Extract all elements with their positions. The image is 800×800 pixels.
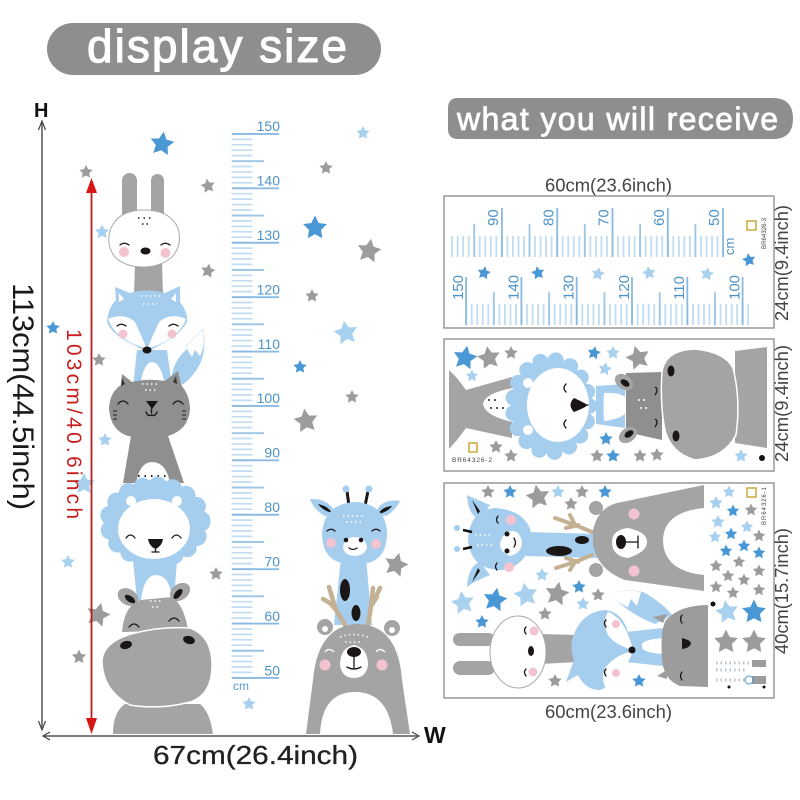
rabbit bbox=[453, 616, 578, 688]
rabbit bbox=[109, 173, 180, 295]
vertical ruler 50 to 150 cm: 80 bbox=[264, 499, 280, 515]
antlers bbox=[323, 587, 380, 625]
size label: bottom 60cm: 60cm(23.6inch) bbox=[545, 702, 672, 722]
ruler ticks: 50 to 90 bbox=[451, 209, 737, 255]
size label: top 60cm: 60cm(23.6inch) bbox=[545, 176, 672, 196]
size label: 24cm sheet 2: 24cm(9.4inch) bbox=[772, 345, 792, 462]
ruler ticks: 100 to 150: 140 bbox=[505, 275, 522, 300]
size label: 24cm sheet 3: 24cm(9.4inch) bbox=[772, 205, 792, 321]
ruler ticks: 50 to 90: 60 bbox=[651, 209, 668, 226]
vertical ruler 50 to 150 cm: 60 bbox=[264, 608, 280, 624]
vertical ruler 50 to 150 cm: 90 bbox=[264, 444, 280, 460]
panel: sheet 3 ruler bbox=[444, 196, 774, 328]
ruler ticks: 100 to 150: 150 bbox=[450, 275, 467, 300]
product code bbox=[747, 217, 768, 249]
ruler ticks: 50 to 90: 90 bbox=[485, 209, 502, 226]
lion body bbox=[596, 384, 627, 428]
product code bbox=[452, 443, 765, 464]
cat bbox=[653, 605, 708, 687]
product code: BR64326-2 bbox=[452, 457, 492, 464]
fox bbox=[566, 610, 663, 690]
red height arrow bbox=[86, 178, 97, 734]
ruler ticks: 50 to 90: cm bbox=[722, 238, 737, 255]
lion bbox=[513, 360, 589, 452]
giraffe bbox=[454, 495, 600, 587]
ruler ticks: 100 to 150: 120 bbox=[616, 275, 633, 300]
ruler ticks: 50 to 90: 80 bbox=[540, 209, 557, 226]
height and width axes: H bbox=[34, 100, 48, 122]
ruler ticks: 100 to 150: 100 bbox=[726, 275, 744, 300]
cat body bbox=[449, 370, 513, 449]
bear bbox=[306, 619, 410, 734]
height and width axes bbox=[34, 100, 446, 748]
size label: 40cm sheet 1: 40cm(15.7inch) bbox=[772, 528, 792, 654]
height and width axes: W bbox=[424, 722, 446, 748]
total height label: 113cm(44.5inch) bbox=[6, 283, 39, 510]
lion bbox=[108, 485, 202, 600]
ruler ticks: 50 to 90: 50 bbox=[706, 209, 723, 226]
cat bbox=[109, 371, 190, 483]
hippo bbox=[102, 579, 213, 734]
vertical ruler 50 to 150 cm bbox=[233, 118, 280, 693]
vertical ruler 50 to 150 cm: 150 bbox=[257, 118, 280, 134]
stars bbox=[452, 343, 748, 462]
product code: BR64326-3 bbox=[762, 217, 768, 249]
product code and mini preview bbox=[710, 486, 768, 688]
fox tail bbox=[610, 590, 672, 624]
antlers bbox=[555, 515, 592, 570]
ruler ticks: 100 to 150: 110 bbox=[671, 276, 688, 300]
giraffe bbox=[310, 486, 400, 625]
heading: display size: display size bbox=[87, 20, 347, 72]
stars: left growth chart bbox=[46, 126, 411, 710]
fox tail bbox=[171, 329, 204, 390]
ruler ticks: 100 to 150: 130 bbox=[561, 275, 578, 300]
product code and mini preview: BR64326-1 bbox=[762, 486, 768, 525]
ruler ticks: 100 to 150 bbox=[450, 275, 749, 314]
vertical ruler 50 to 150 cm: 70 bbox=[264, 554, 280, 570]
heading: what you will receive: what you will receive bbox=[456, 101, 778, 137]
panel: sheet 2 lion and hippo bbox=[444, 339, 774, 471]
panel: sheet 1 animals and stars bbox=[444, 483, 774, 698]
vertical ruler 50 to 150 cm: 140 bbox=[257, 172, 280, 188]
vertical ruler 50 to 150 cm: 110 bbox=[258, 336, 280, 352]
total width label: 67cm(26.4inch) bbox=[153, 740, 358, 770]
vertical ruler 50 to 150 cm: 50 bbox=[264, 662, 280, 678]
vertical ruler 50 to 150 cm: 100 bbox=[257, 390, 280, 406]
vertical ruler 50 to 150 cm: 120 bbox=[257, 282, 280, 298]
bear bbox=[589, 485, 704, 591]
ruler ticks: 50 to 90: 70 bbox=[596, 209, 613, 226]
hippo bbox=[612, 347, 767, 460]
red height label: 103cm/40.6inch bbox=[62, 329, 85, 519]
vertical ruler 50 to 150 cm: cm bbox=[233, 679, 249, 693]
vertical ruler 50 to 150 cm: 130 bbox=[257, 227, 280, 243]
fox bbox=[107, 286, 187, 386]
stars bbox=[476, 252, 757, 281]
stars bbox=[450, 483, 766, 687]
